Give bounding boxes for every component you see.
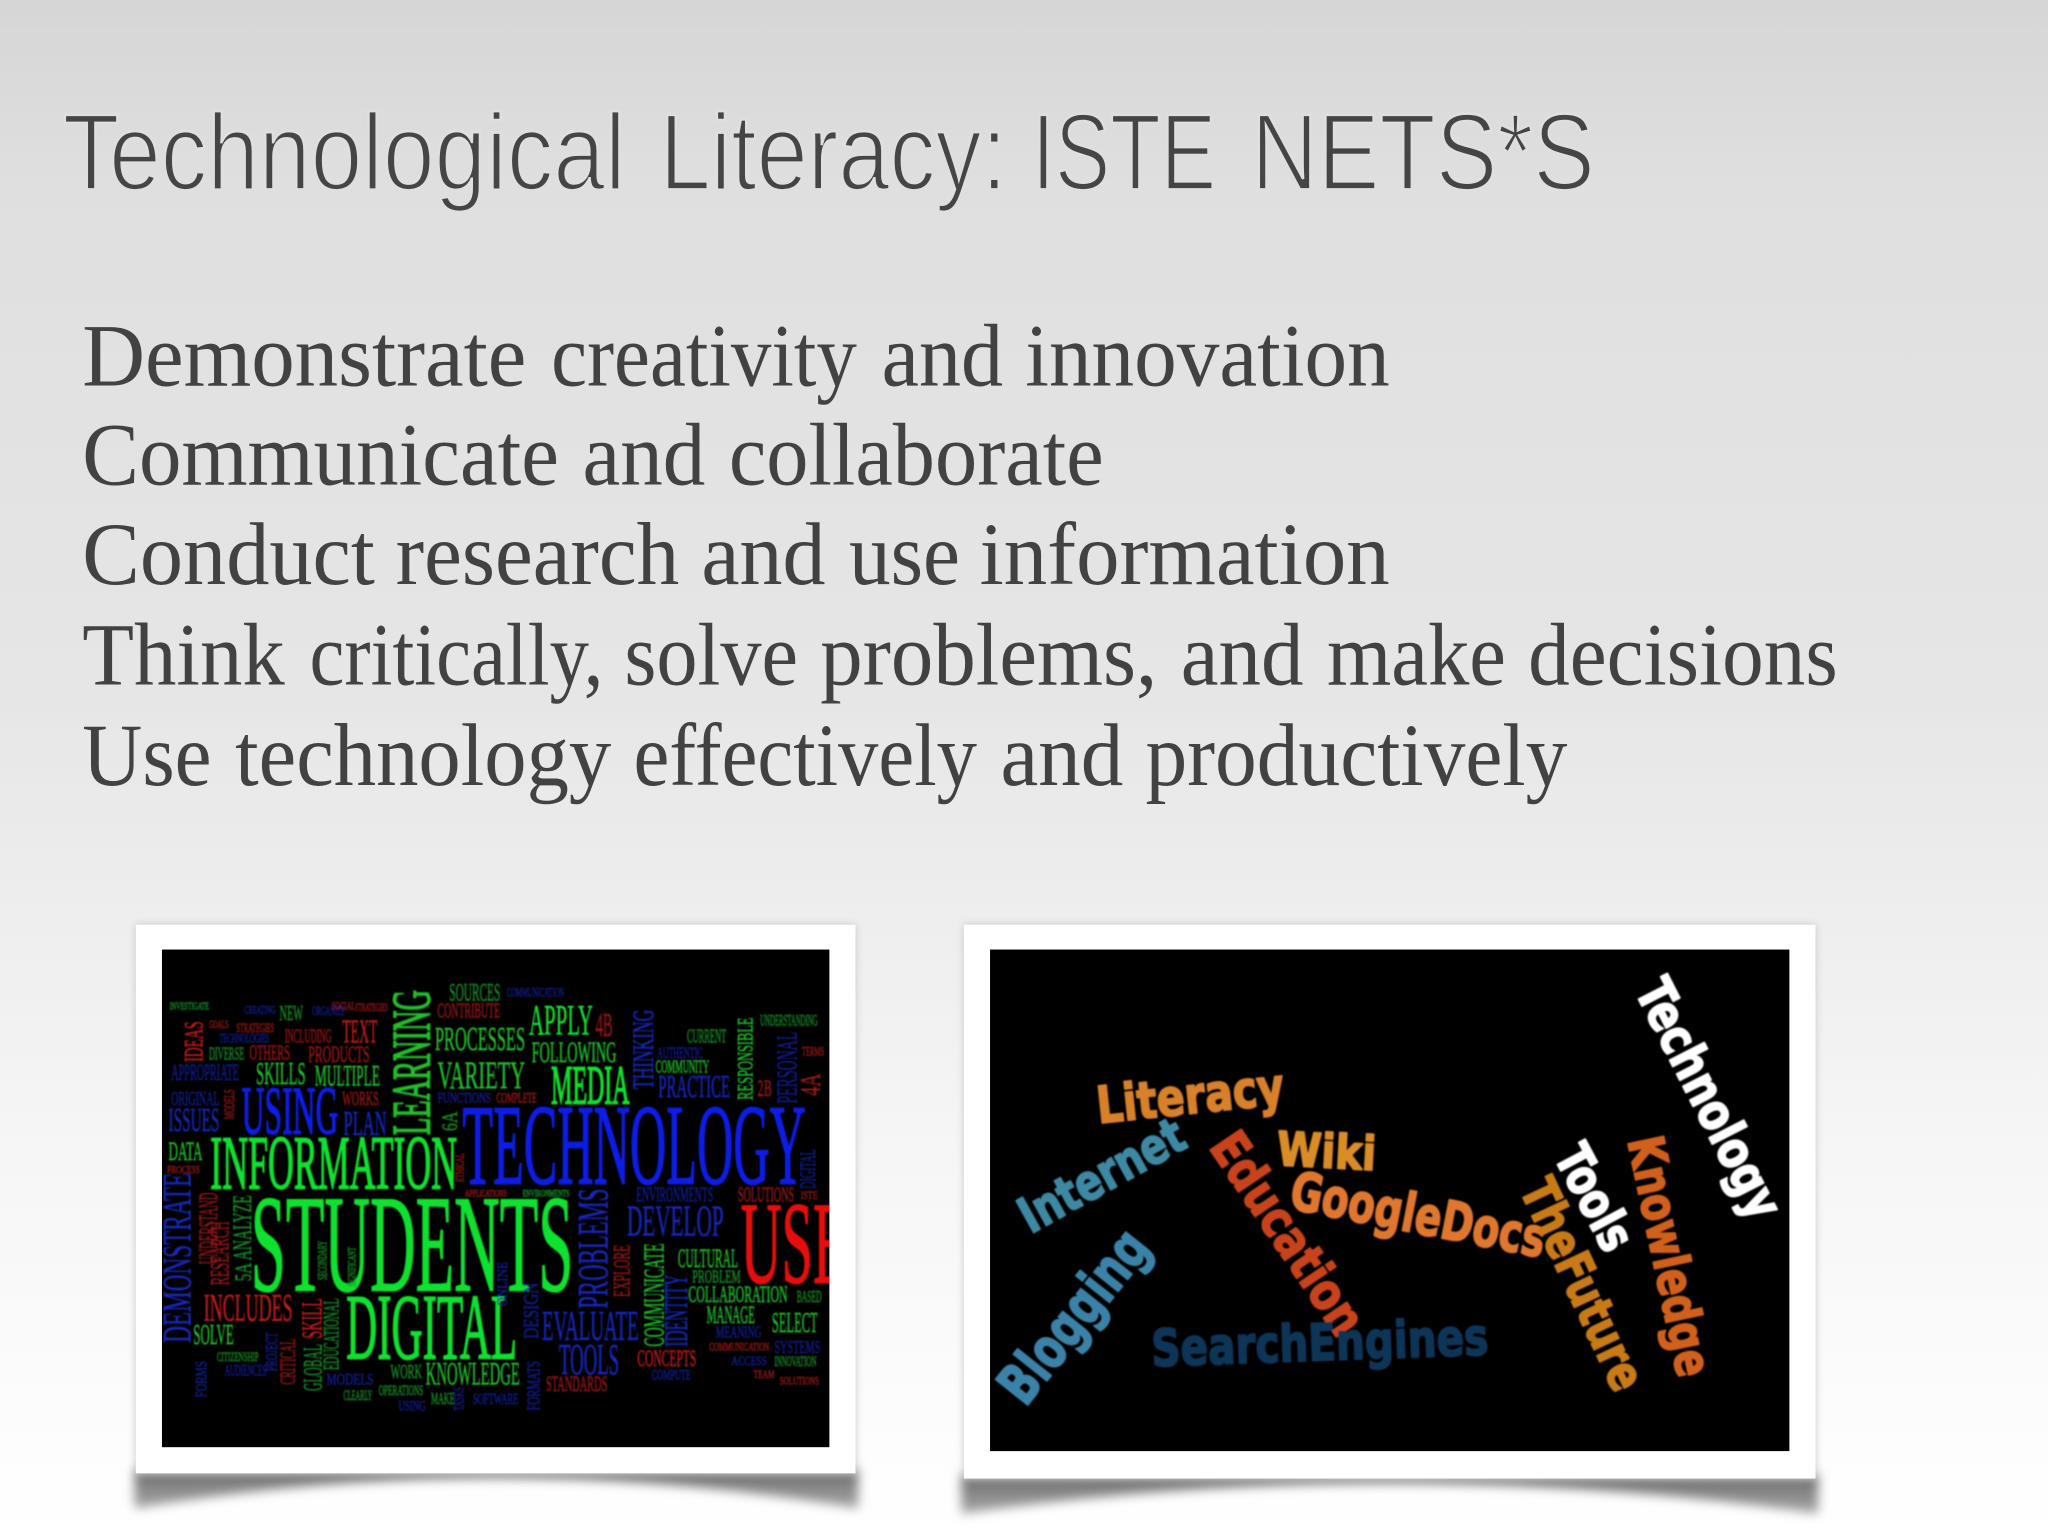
supporting vocabulary: ACCESS [731, 1353, 767, 1368]
supporting vocabulary: ANALYZE [228, 1195, 257, 1260]
word cloud: technology terms [985, 969, 1794, 1417]
supporting vocabulary: COMMUNICATION [709, 1341, 770, 1354]
supporting vocabulary: TEXT [342, 1013, 378, 1050]
standard 1: and [882, 307, 1003, 405]
supporting vocabulary: 6A [437, 1112, 462, 1131]
supporting vocabulary: FORMATS [523, 1361, 543, 1411]
supporting vocabulary: CLEARLY [344, 1388, 372, 1404]
supporting vocabulary: SYSTEMS [775, 1337, 820, 1357]
supporting vocabulary: IDENTITY [659, 1275, 695, 1347]
supporting vocabulary: THINKING [627, 1010, 660, 1089]
supporting vocabulary: OTHERS [249, 1040, 290, 1064]
standard 3: research [396, 506, 679, 604]
word: Blogging: Blogging [985, 1217, 1163, 1417]
supporting vocabulary: RESEARCH [206, 1221, 235, 1285]
supporting vocabulary: OPERATIONS [379, 1383, 423, 1399]
supporting vocabulary: SKILL [296, 1298, 328, 1339]
title [63, 91, 1595, 212]
standard 1: innovation [1025, 307, 1390, 405]
standard 2: Communicate [82, 407, 559, 505]
title: Literacy: [660, 91, 1007, 212]
supporting vocabulary: INCLUDING [285, 1026, 332, 1047]
supporting vocabulary: 4A [795, 1073, 827, 1096]
standard 5: and [1000, 707, 1123, 805]
panel: left word cloud photo [135, 925, 858, 1509]
standard 5: effectively [633, 707, 978, 805]
supporting vocabulary: WORKS [342, 1089, 379, 1110]
word: LEARNING: LEARNING [382, 990, 442, 1135]
supporting vocabulary: DATA [168, 1137, 203, 1166]
supporting vocabulary: COLLABORATION [688, 1282, 788, 1308]
supporting vocabulary: CREATING [244, 1004, 276, 1017]
supporting vocabulary: USING [398, 1399, 426, 1415]
word: Knowledge: Knowledge [1616, 1131, 1723, 1382]
supporting vocabulary: RESPONSIBLE [732, 1017, 757, 1100]
supporting vocabulary: COMMUNITY [656, 1056, 709, 1076]
supporting vocabulary: PROCESS [167, 1165, 200, 1176]
supporting vocabulary: NEW [280, 1001, 303, 1025]
supporting vocabulary: SOCIAL [332, 1000, 355, 1013]
supporting vocabulary: ORGANIZE [312, 1003, 345, 1018]
bullet list: five standards [82, 307, 1838, 805]
supporting vocabulary: EDUCATIONAL [318, 1298, 343, 1370]
supporting vocabulary: FORMS [193, 1361, 210, 1398]
standard 4 [82, 606, 1838, 704]
supporting vocabulary: 2B [758, 1076, 772, 1102]
standard 2: collaborate [729, 407, 1104, 505]
supporting vocabulary: APPLICATIONS [465, 1188, 507, 1198]
word: Education: Education [1197, 1121, 1376, 1347]
supporting vocabulary: AUTHENTIC [657, 1045, 703, 1062]
supporting vocabulary: SOLUTIONS [780, 1374, 819, 1387]
supporting vocabulary: TERMS [802, 1043, 824, 1058]
supporting vocabulary: MODELS [327, 1371, 374, 1388]
standard 3 [82, 506, 1390, 604]
supporting vocabulary: PROBLEMS [570, 1189, 617, 1309]
supporting vocabulary: SOURCES [449, 979, 500, 1006]
supporting vocabulary: KNOWLEDGE [426, 1356, 520, 1392]
supporting vocabulary: COMPLETE [496, 1090, 537, 1106]
supporting vocabulary: 5A [231, 1263, 257, 1281]
supporting vocabulary [155, 979, 827, 1415]
supporting vocabulary: COMMUNICATION [507, 985, 565, 1000]
supporting vocabulary: WORK [391, 1362, 422, 1383]
supporting vocabulary: PRACTICE [658, 1069, 730, 1104]
word: SearchEngines: SearchEngines [1150, 1308, 1489, 1379]
supporting vocabulary: SECONDARY [315, 1241, 330, 1280]
supporting vocabulary: EXPLORE [610, 1245, 636, 1297]
word: Technology: Technology [1622, 969, 1794, 1229]
supporting vocabulary: ENVIRONMENTS [522, 1188, 569, 1198]
word cloud: ISTE standards vocabulary: INFORMATION [210, 1122, 457, 1206]
supporting vocabulary: FUNCTIONS [438, 1090, 491, 1106]
title: NETS*S [1251, 91, 1595, 212]
supporting vocabulary: INNOVATION [775, 1354, 817, 1370]
supporting vocabulary: MANAGE [707, 1302, 755, 1329]
supporting vocabulary: ISSUES [168, 1102, 219, 1139]
supporting vocabulary: EVALUATE [542, 1304, 639, 1350]
supporting vocabulary: COMMUNICATE [639, 1243, 671, 1347]
supporting vocabulary: PROJECT [262, 1332, 281, 1371]
supporting vocabulary: TECHNOLOGIES [219, 1030, 269, 1045]
supporting vocabulary: ORIGINAL [171, 1089, 219, 1110]
supporting vocabulary: DESIGN [519, 1283, 543, 1339]
supporting vocabulary: PLAN [344, 1104, 387, 1143]
standard 4: and [1181, 606, 1304, 704]
word: GoogleDocs: GoogleDocs [1285, 1159, 1551, 1270]
supporting vocabulary: FOLLOWING [532, 1036, 616, 1069]
word cloud: ISTE standards vocabulary: MEDIA [551, 1055, 630, 1116]
supporting vocabulary: ONLINE [495, 1262, 511, 1306]
supporting vocabulary: APPLY [529, 997, 593, 1044]
supporting vocabulary: MULTIPLE [315, 1059, 380, 1092]
standard 3: and [701, 506, 825, 604]
word cloud: ISTE standards vocabulary: STUDENTS [251, 1167, 573, 1320]
word: Wiki: Wiki [1275, 1122, 1377, 1182]
panel: right word cloud photo [961, 925, 1818, 1514]
supporting vocabulary: CITIZENSHIP [217, 1349, 259, 1364]
standard 1 [82, 307, 1390, 405]
supporting vocabulary: GLOBAL [298, 1344, 327, 1391]
standard 4: solve [624, 606, 798, 704]
supporting vocabulary: ENVIRONMENTS [636, 1183, 713, 1207]
supporting vocabulary: SELECT [772, 1307, 818, 1339]
supporting vocabulary: 4B [596, 1007, 613, 1044]
supporting vocabulary: CURRENT [687, 1026, 726, 1047]
supporting vocabulary: STRATEGIES [355, 1001, 388, 1014]
supporting vocabulary: PROCESSES [435, 1021, 525, 1058]
supporting vocabulary: DIGITAL [795, 1149, 820, 1189]
word cloud: ISTE standards vocabulary: DIGITAL [346, 1276, 517, 1379]
supporting vocabulary: STRATEGIES [236, 1020, 274, 1035]
supporting vocabulary: CONCEPTS [637, 1346, 696, 1372]
panel: left word cloud photo: USE [741, 1180, 848, 1309]
supporting vocabulary: COMPUTE [652, 1367, 691, 1383]
word: Internet: Internet [1008, 1106, 1195, 1245]
standard 1: creativity [551, 307, 857, 405]
supporting vocabulary: PRODUCTS [308, 1042, 370, 1068]
standard 5: technology [235, 707, 612, 805]
supporting vocabulary: DEVELOP [627, 1196, 724, 1246]
standard 4: make [1327, 606, 1506, 704]
supporting vocabulary: VARIETY [438, 1054, 525, 1097]
standard 4: problems, [820, 606, 1157, 704]
supporting vocabulary: CULTURAL [678, 1244, 738, 1273]
supporting vocabulary: SOLUTIONS [738, 1183, 794, 1207]
standard 2: and [583, 407, 705, 505]
supporting vocabulary: IDEAS [179, 1021, 208, 1062]
supporting vocabulary: INVESTIGATE [170, 1002, 209, 1013]
supporting vocabulary: STANDARDS [546, 1371, 607, 1396]
title: Technological [63, 91, 626, 212]
supporting vocabulary: MODELS [222, 1089, 238, 1119]
standard 3: use [849, 506, 960, 604]
supporting vocabulary: AUDIENCES [225, 1362, 266, 1379]
supporting vocabulary: DIVERSE [209, 1043, 244, 1063]
supporting vocabulary: BASED [797, 1287, 822, 1306]
word: Literacy: Literacy [1094, 1058, 1287, 1136]
standard 4: critically, [310, 606, 603, 704]
standard 5: productively [1145, 707, 1568, 805]
supporting vocabulary: TOOLS [559, 1334, 619, 1384]
supporting vocabulary: UNDERSTAND [194, 1192, 223, 1264]
supporting vocabulary: APPROPRIATE [171, 1060, 239, 1086]
supporting vocabulary: ETHICAL [454, 1153, 467, 1182]
panel: left word cloud photo: TECHNOLOGY [462, 1081, 806, 1208]
supporting vocabulary: ISTE [801, 1189, 818, 1202]
supporting vocabulary: UNDERSTANDING [760, 1012, 818, 1029]
standard 5: Use [82, 707, 212, 805]
standard 1: Demonstrate [82, 307, 526, 405]
word: TheFuture: TheFuture [1508, 1169, 1657, 1400]
supporting vocabulary: SKILLS [256, 1056, 306, 1091]
supporting vocabulary: SIGNIFICANT [345, 1247, 358, 1287]
standard 4: Think [82, 606, 285, 704]
supporting vocabulary: MAKE [431, 1389, 455, 1408]
supporting vocabulary: SOLVE [193, 1319, 234, 1351]
standard 5 [82, 707, 1568, 805]
supporting vocabulary: TEAM [754, 1368, 775, 1381]
standard 4: decisions [1528, 606, 1838, 704]
supporting vocabulary: DEMONSTRATE [155, 1173, 200, 1343]
supporting vocabulary: MEANING [716, 1322, 761, 1341]
word: Tools: Tools [1542, 1134, 1646, 1261]
standard 3: information [980, 506, 1390, 604]
supporting vocabulary: CONTRIBUTE [438, 998, 500, 1022]
supporting vocabulary: TASKS [452, 1387, 468, 1411]
supporting vocabulary: GOALS [209, 1018, 229, 1031]
supporting vocabulary: INCLUDES [204, 1286, 293, 1329]
standard 2 [82, 407, 1104, 505]
supporting vocabulary: PROBLEM [692, 1267, 741, 1287]
word cloud: ISTE standards vocabulary [155, 979, 848, 1415]
supporting vocabulary: SOFTWARE [473, 1391, 519, 1408]
word cloud: ISTE standards vocabulary: USING [242, 1073, 338, 1149]
standard 3: Conduct [82, 506, 375, 604]
supporting vocabulary: CRITICAL [275, 1339, 300, 1384]
title: ISTE [1032, 91, 1216, 212]
supporting vocabulary: PERSONAL [772, 1032, 804, 1104]
